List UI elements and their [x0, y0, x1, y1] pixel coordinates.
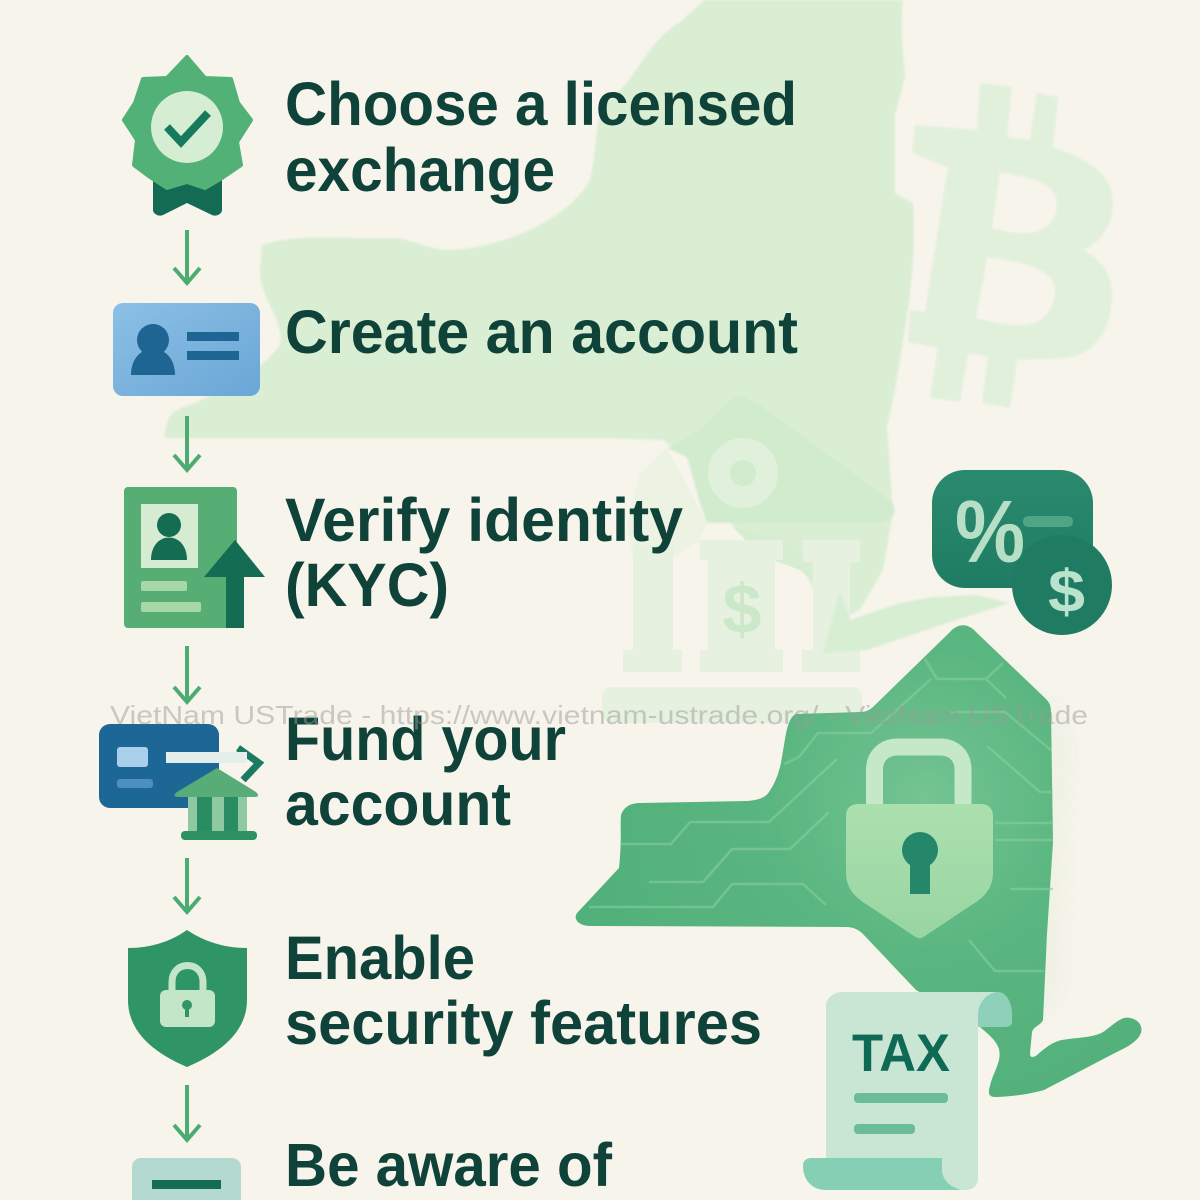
heading: step 3: (KYC)	[285, 551, 449, 619]
padlock	[846, 747, 993, 938]
icon: tax document	[803, 992, 1012, 1190]
icon: percent and dollar badge	[932, 470, 1112, 635]
background bank icon: $	[723, 570, 761, 648]
columns	[602, 540, 862, 723]
medallion	[719, 449, 767, 497]
heading: step 4: account	[285, 770, 511, 838]
arrow 4	[174, 858, 200, 912]
foreground New York map	[576, 625, 1141, 1097]
circuit lines on map	[589, 659, 1053, 971]
heading: step 5: Enable	[285, 924, 475, 992]
icon: verify identity document	[124, 487, 265, 628]
background bitcoin symbol	[908, 83, 1113, 408]
arrow 3	[174, 646, 200, 702]
icon: percent and dollar badge: $	[1048, 558, 1085, 625]
background bank icon	[602, 397, 894, 723]
heading: step 1: exchange	[285, 136, 555, 204]
icon: bank transfer card	[99, 724, 259, 840]
heading: step 4: Fund your	[285, 705, 566, 773]
icon: licensed exchange badge	[124, 57, 251, 216]
arrow 1	[174, 230, 200, 283]
icon: security shield	[128, 930, 247, 1067]
icon: ID card	[113, 303, 260, 396]
foreground map glow	[880, 650, 1058, 1030]
Long Island pale strip	[823, 590, 1010, 653]
arrow 5	[174, 1085, 200, 1140]
icon: percent and dollar badge: %	[955, 482, 1025, 581]
heading: step 3: Verify identity	[285, 486, 683, 554]
icon: tax awareness document	[132, 1158, 241, 1200]
heading: step 5: security features	[285, 989, 762, 1057]
heading: step 6: Be aware of	[285, 1131, 613, 1199]
icon: tax document: TAX	[852, 1024, 950, 1083]
arrow 2	[174, 416, 200, 470]
background map silhouette	[165, 0, 914, 625]
watermark: VietNam USTrade - https://www.vietnam-ustrade.org/ - VietNam USTrade	[110, 700, 1088, 730]
heading: step 2: Create an account	[285, 298, 798, 366]
heading: step 1: Choose a licensed	[285, 70, 797, 138]
